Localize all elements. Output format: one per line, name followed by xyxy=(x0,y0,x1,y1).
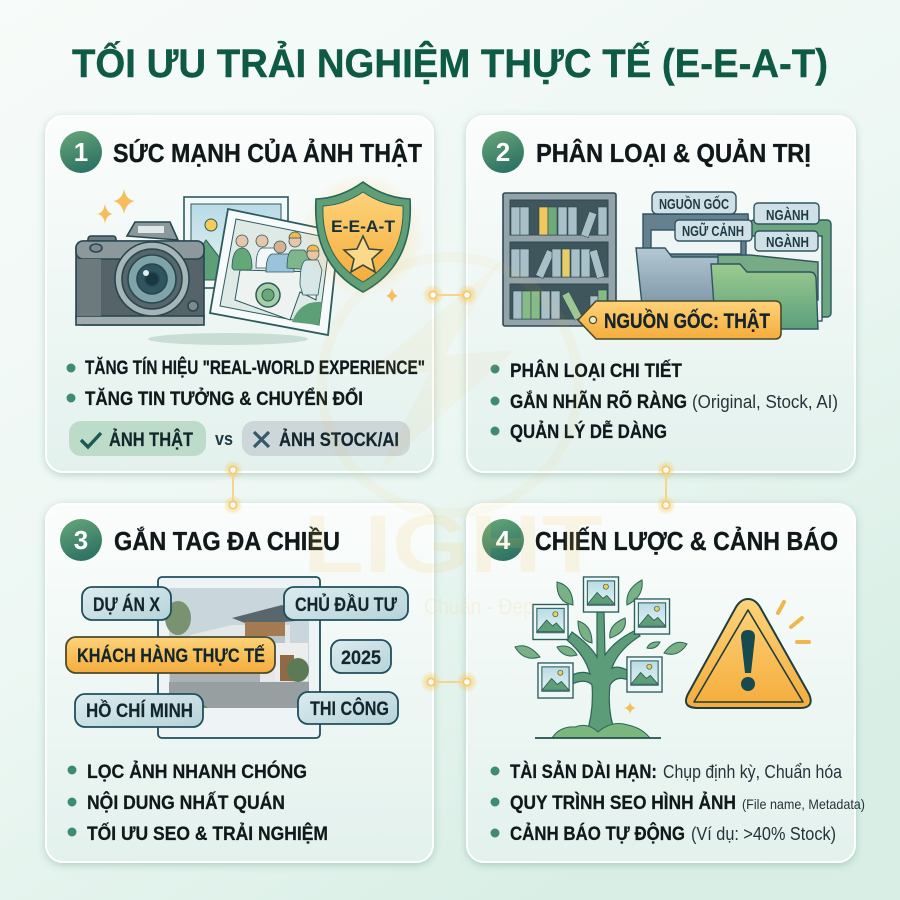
vs label: vs xyxy=(215,429,233,449)
icon: back photo xyxy=(184,197,288,288)
number badge 2 xyxy=(482,131,524,173)
number badge 3 xyxy=(60,519,102,561)
bullets 4: TÀI SẢN DÀI HẠN: xyxy=(510,761,657,783)
tag: nguồn gốc thật xyxy=(578,301,781,339)
bullets 4 xyxy=(490,761,865,845)
tag: dự án X xyxy=(82,587,171,620)
icon: E-E-A-T shield: E-E-A-T xyxy=(331,217,396,236)
tag: chủ đầu tư: CHỦ ĐẦU TƯ xyxy=(295,594,397,616)
bullets 3: NỘI DUNG NHẤT QUÁN xyxy=(87,792,285,814)
connector: panels 1-2 xyxy=(422,284,478,306)
tag: 2025: 2025 xyxy=(341,648,381,669)
bullets 3: TỐI ƯU SEO & TRẢI NGHIỆM xyxy=(87,823,328,845)
icon: folders xyxy=(636,192,831,329)
bullets 4: (File name, Metadata) xyxy=(742,796,865,812)
number badge 3: 3 xyxy=(74,525,88,555)
folder labels: NGUỒN GỐC xyxy=(659,195,729,213)
connector: panels 2-4 xyxy=(656,460,676,515)
bullets 1: TĂNG TÍN HIỆU "REAL-WORLD EXPERIENCE" xyxy=(85,357,425,379)
number badge 1 xyxy=(60,131,102,173)
bullets 2: QUẢN LÝ DỄ DÀNG xyxy=(510,421,667,443)
bullets 1 xyxy=(66,357,425,410)
tag: hồ chí minh xyxy=(75,694,203,727)
connector: panels 1-3 xyxy=(223,460,243,515)
icon: E-E-A-T shield xyxy=(301,173,425,297)
icon: bookcase xyxy=(503,193,616,326)
folder labels: NGỮ CẢNH xyxy=(682,222,744,240)
bullets 2: GẮN NHÃN RÕ RÀNG xyxy=(510,391,687,413)
bullets 4: Chụp định kỳ, Chuẩn hóa xyxy=(663,762,843,782)
watermark xyxy=(303,257,603,619)
tag: dự án X: DỰ ÁN X xyxy=(93,594,160,616)
heading 3: GẮN TAG ĐA CHIỀU xyxy=(114,526,340,556)
tag: nguồn gốc thật: NGUỒN GỐC: THẬT xyxy=(604,309,770,333)
connector: panels 3-4 xyxy=(420,671,478,693)
icon: camera xyxy=(76,222,204,325)
icon: warning triangle xyxy=(686,599,811,708)
pill: ảnh thật: ẢNH THẬT xyxy=(109,429,193,451)
number badge 4 xyxy=(482,519,524,561)
folder labels xyxy=(659,195,809,251)
bullets 1: TĂNG TIN TƯỞNG & CHUYỂN ĐỔI xyxy=(85,388,363,410)
bullets 2: (Original, Stock, AI) xyxy=(692,392,838,412)
panel: 4 chiến lược & cảnh báo xyxy=(467,504,865,862)
tag: 2025 xyxy=(331,640,391,673)
tag: chủ đầu tư xyxy=(284,587,408,620)
title: TỐI ƯU TRẢI NGHIỆM THỰC TẾ (E-E-A-T) xyxy=(72,40,828,86)
icon: sparkles xyxy=(97,189,398,303)
tag: thi công: THI CÔNG xyxy=(310,698,389,720)
tag: thi công xyxy=(298,692,398,724)
icon: team photo xyxy=(210,209,339,335)
number badge 2: 2 xyxy=(496,137,510,167)
bullets 3 xyxy=(68,761,328,845)
heading 1: SỨC MẠNH CỦA ẢNH THẬT xyxy=(113,137,422,168)
watermark: Chuẩn - Đẹp xyxy=(424,594,534,619)
bullets 4: QUY TRÌNH SEO HÌNH ẢNH xyxy=(510,792,736,814)
number badge 1: 1 xyxy=(74,137,88,167)
tag: hồ chí minh: HỒ CHÍ MINH xyxy=(86,700,193,722)
bullets 2: PHÂN LOẠI CHI TIẾT xyxy=(510,360,682,382)
heading 2: PHÂN LOẠI & QUẢN TRỊ xyxy=(536,138,811,168)
pill: ảnh stock/AI xyxy=(242,421,410,456)
pill: ảnh stock/AI: ẢNH STOCK/AI xyxy=(279,429,399,451)
panel: 3 gắn tag đa chiều xyxy=(46,504,433,862)
house photo xyxy=(158,577,320,738)
bullets 4: CẢNH BÁO TỰ ĐỘNG xyxy=(510,823,685,845)
pill: ảnh thật xyxy=(69,421,206,456)
heading 4: CHIẾN LƯỢC & CẢNH BÁO xyxy=(535,526,838,556)
watermark: LIGHT xyxy=(303,499,603,590)
tag: khách hàng thực tế: KHÁCH HÀNG THỰC TẾ xyxy=(77,645,265,667)
bullets 2 xyxy=(490,360,838,443)
folder labels: NGÀNH xyxy=(766,207,809,224)
number badge 4: 4 xyxy=(496,525,511,555)
folder labels: NGÀNH xyxy=(766,234,809,251)
panel: 2 phân loại & quản trị xyxy=(467,116,855,472)
panel: 1 sức mạnh của ảnh thật xyxy=(46,116,433,472)
bullets 4: (Ví dụ: >40% Stock) xyxy=(691,824,836,844)
tag: khách hàng thực tế xyxy=(66,637,275,673)
bullets 3: LỌC ẢNH NHANH CHÓNG xyxy=(87,761,307,783)
icon: tree with photos xyxy=(515,577,687,738)
